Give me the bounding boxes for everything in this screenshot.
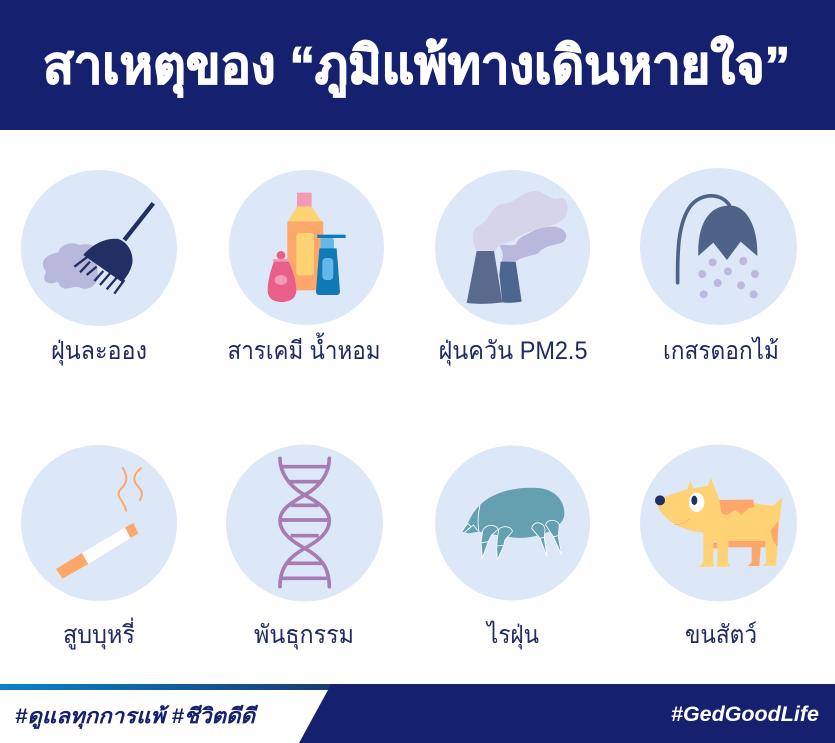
label: dust mites: ไรฝุ่น — [485, 620, 539, 650]
label: dust: ฝุ่นละออง — [51, 337, 147, 366]
icon: DNA — [226, 444, 383, 602]
label: genetics: พันธุกรรม — [254, 621, 354, 650]
label: smoke PM2.5: ฝุ่นควัน PM2.5 — [438, 337, 588, 366]
icon: dust and broom — [21, 170, 177, 326]
hashtags left: #ดูแลทุกการแพ้ #ชีวิตดีดี — [15, 704, 259, 729]
title: สาเหตุของ “ภูมิแพ้ทางเดินหายใจ” — [43, 35, 790, 98]
title banner — [0, 0, 835, 130]
hashtag right: #GedGoodLife — [671, 703, 819, 726]
icon: dust mite — [435, 446, 590, 600]
label: smoking: สูบบุหรี่ — [63, 617, 135, 650]
label: pollen: เกสรดอกไม้ — [663, 336, 779, 365]
icon: chemicals and perfume — [229, 170, 384, 325]
icon: cigarette — [21, 445, 177, 601]
icon: factory smoke — [435, 170, 590, 325]
icon: dog — [640, 444, 797, 602]
label: animal fur: ขนสัตว์ — [685, 621, 757, 649]
footer bar — [0, 684, 835, 743]
icon: pollen flower — [640, 168, 797, 325]
label: chemicals: สารเคมี น้ำหอม — [228, 332, 380, 365]
